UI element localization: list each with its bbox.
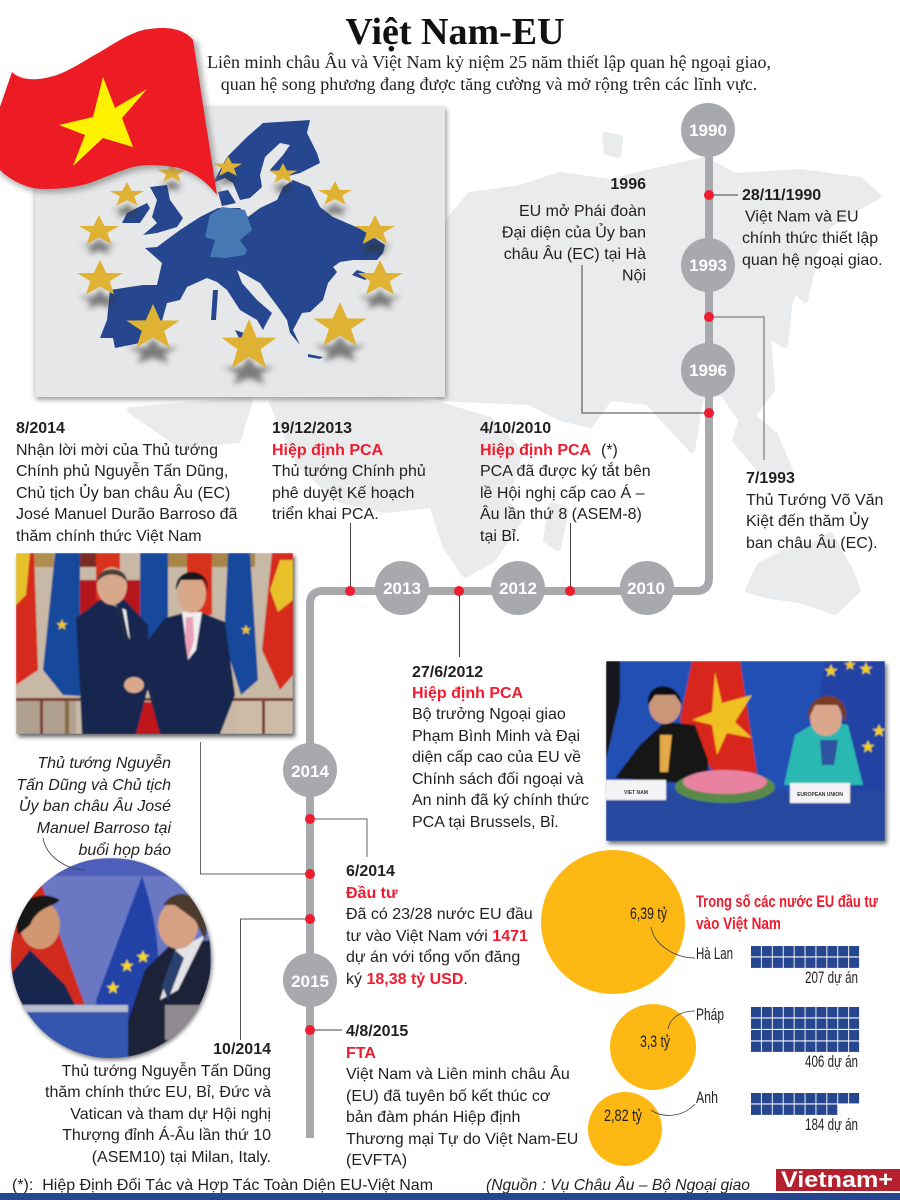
event: 10/2014: Vatican và tham dự Hội nghị xyxy=(70,1106,271,1123)
project squares: UK: 184 dự án xyxy=(805,1115,858,1134)
event: 27/6/2012: 27/6/2012 xyxy=(412,664,483,681)
photo: press conference circle xyxy=(9,857,215,1063)
event: 4/10/2010: Âu lần thứ 8 (ASEM-8) xyxy=(480,504,642,523)
project squares: France: 406 dự án xyxy=(805,1052,858,1071)
event: 27/6/2012: PCA tại Brussels, Bỉ. xyxy=(412,814,559,831)
event: 4/10/2010: 4/10/2010 xyxy=(480,420,551,437)
bottom strip xyxy=(0,1193,900,1200)
EU stars xyxy=(77,156,403,368)
year labels: 2013 xyxy=(383,579,421,598)
bubble: UK xyxy=(588,1088,718,1166)
background world map xyxy=(130,135,878,612)
event: 28/11/1990: 28/11/1990 xyxy=(742,187,821,204)
event: 4/8/2015: (EU) đã tuyên bố kết thúc cơ xyxy=(346,1088,551,1105)
project squares: Netherlands xyxy=(751,946,860,987)
bubble: France: 3,3 tỷ xyxy=(640,1032,670,1051)
project squares: Netherlands: 207 dự án xyxy=(805,968,858,987)
event: 10/2014: 10/2014 xyxy=(213,1041,271,1058)
caption leader line xyxy=(43,838,86,870)
year labels: 2010 xyxy=(627,579,665,598)
event: 4/8/2015: Việt Nam và Liên minh châu Âu xyxy=(346,1064,570,1083)
photo: Barroso and Nguyen Tan Dung handshake xyxy=(16,553,295,737)
bubble: UK: 2,82 tỷ xyxy=(604,1106,642,1125)
event: 27/6/2012: Hiệp định PCA xyxy=(412,685,524,702)
event: 8/2014: Chính phủ Nguyễn Tấn Dũng, xyxy=(16,461,228,480)
photo caption: Tấn Dũng và Chủ tịch xyxy=(16,777,171,794)
event: 4/10/2010: PCA đã được ký tắt bên xyxy=(480,461,651,480)
event: 6/2014: 6/2014 xyxy=(346,863,395,880)
event: 7/1993: 7/1993 xyxy=(746,470,795,487)
event: 28/11/1990: Việt Nam và EU xyxy=(745,208,859,226)
year labels: 2012 xyxy=(499,579,537,598)
event: 7/1993: Thủ Tướng Võ Văn xyxy=(746,492,883,509)
event: 8/2014: Chủ tịch Ủy ban châu Âu (EC) xyxy=(16,483,230,502)
event: 10/2014: (ASEM10) tại Milan, Italy. xyxy=(92,1149,271,1166)
photo: PCA signing xyxy=(606,659,887,844)
chart heading xyxy=(696,893,878,933)
event: 4/8/2015: FTA xyxy=(346,1045,376,1062)
event: 8/2014: 8/2014 xyxy=(16,420,65,437)
year labels xyxy=(291,121,727,991)
photo caption: Manuel Barroso tại xyxy=(37,820,171,837)
year labels: 1996 xyxy=(689,361,727,380)
event: 19/12/2013: Thủ tướng Chính phủ xyxy=(272,463,426,480)
event: 4/10/2010: lề Hội nghị cấp cao Á – xyxy=(480,483,645,502)
project squares: UK xyxy=(751,1093,860,1134)
timeline xyxy=(200,103,764,1138)
year labels: 1990 xyxy=(689,121,727,140)
Germany xyxy=(205,207,252,258)
year nodes xyxy=(283,103,735,1007)
event: 7/1993: Kiệt đến thăm Ủy xyxy=(746,511,869,530)
bubble: France xyxy=(610,1004,724,1090)
title: Việt Nam-EU xyxy=(345,11,565,53)
event: 28/11/1990: quan hệ ngoại giao. xyxy=(742,252,883,269)
event: 27/6/2012: diện cấp cao của EU về xyxy=(412,749,581,766)
photo caption: Thủ tướng Nguyễn xyxy=(37,753,171,772)
event: 6/2014: Đầu tư xyxy=(346,885,398,902)
photo caption: buổi họp báo xyxy=(78,841,171,859)
event: 10/2014: Thượng đỉnh Á-Âu lần thứ 10 xyxy=(62,1125,271,1144)
event: 1996: châu Âu (EC) tại Hà xyxy=(504,244,646,263)
connector lines xyxy=(200,195,764,1040)
event: 4/10/2010: tại Bỉ. xyxy=(480,528,520,545)
EU star shadows xyxy=(79,173,401,384)
event: 19/12/2013: Hiệp định PCA xyxy=(272,442,384,459)
chart heading: vào Việt Nam xyxy=(696,915,781,933)
photo: PCA signing: EUROPEAN UNION xyxy=(797,792,843,798)
footnote: (*): Hiệp Định Đối Tác và Hợp Tác Toàn Diện EU-Việt Nam xyxy=(12,1177,433,1194)
event: 1996: Đại diện của Ủy ban xyxy=(502,222,646,242)
event: 19/12/2013: 19/12/2013 xyxy=(272,420,352,437)
event: 4/8/2015: bản đàm phán Hiệp định xyxy=(346,1109,520,1126)
bubble: Netherlands: Hà Lan xyxy=(696,944,733,963)
event: 1996: 1996 xyxy=(610,176,646,193)
photo caption: Ủy ban châu Âu José xyxy=(19,796,171,815)
chart: EU investors in Vietnam xyxy=(541,850,878,1166)
year labels: 2015 xyxy=(291,972,329,991)
event: 4/8/2015: (EVFTA) xyxy=(346,1152,407,1169)
event: 10/2014: Thủ tướng Nguyễn Tấn Dũng xyxy=(62,1061,271,1080)
event: 4/8/2015: Thương mại Tự do Việt Nam-EU xyxy=(346,1131,578,1148)
event: 8/2014: Nhận lời mời của Thủ tướng xyxy=(16,442,218,459)
event: 6/2014: tư vào Việt Nam với 1471 xyxy=(346,928,528,945)
bubble: Netherlands: 6,39 tỷ xyxy=(630,904,667,923)
event: 27/6/2012: Phạm Bình Minh và Đại xyxy=(412,728,580,745)
event: 27/6/2012: An ninh đã ký chính thức xyxy=(412,792,589,809)
photo: PCA signing: VIET NAM xyxy=(624,790,648,796)
event: 19/12/2013: phê duyệt Kế hoạch xyxy=(272,485,414,502)
event: 28/11/1990: chính thức thiết lập xyxy=(742,230,878,247)
event: 7/1993: ban châu Âu (EC). xyxy=(746,533,878,552)
event: 6/2014: Đã có 23/28 nước EU đầu xyxy=(346,906,533,923)
year labels: 1993 xyxy=(689,256,727,275)
event: 27/6/2012: Chính sách đối ngoại và xyxy=(412,771,584,788)
project squares: France xyxy=(751,1007,860,1071)
subtitle: Liên minh châu Âu và Việt Nam kỷ niệm 25 năm thiết lập quan hệ ngoại giao, xyxy=(207,51,771,72)
event: 4/10/2010: Hiệp định PCA xyxy=(480,442,592,459)
event: 4/8/2015: 4/8/2015 xyxy=(346,1023,408,1040)
event: 8/2014: José Manuel Durão Barroso đã xyxy=(16,506,238,523)
bubble: Netherlands xyxy=(541,850,733,994)
bubble: France: Pháp xyxy=(696,1005,724,1024)
event: 1996: EU mở Phái đoàn xyxy=(519,203,646,220)
event: 4/10/2010: (*) xyxy=(601,442,618,459)
logo: Vietnam+: Vietnam+ xyxy=(781,1167,893,1192)
event: 8/2014: thăm chính thức Việt Nam xyxy=(16,528,202,545)
bubble: UK: Anh xyxy=(696,1088,718,1107)
event: 1996: Nội xyxy=(622,268,646,284)
icon: Vietnam flag xyxy=(0,28,220,197)
event: 27/6/2012: Bộ trưởng Ngoại giao xyxy=(412,706,566,723)
event: 19/12/2013: triển khai PCA. xyxy=(272,505,379,523)
event: 6/2014: ký 18,38 tỷ USD. xyxy=(346,971,468,988)
event: 6/2014: dự án với tổng vốn đăng xyxy=(346,948,520,966)
panel: EU map xyxy=(35,107,446,399)
subtitle: quan hệ song phương đang được tăng cường và mở rộng trên các lĩnh vực. xyxy=(221,74,757,94)
year labels: 2014 xyxy=(291,762,329,781)
map of Europe xyxy=(100,120,385,359)
source: (Nguồn : Vụ Châu Âu – Bộ Ngoại giao xyxy=(486,1175,750,1194)
event: 10/2014: thăm chính thức EU, Bỉ, Đức và xyxy=(45,1084,271,1101)
red event dots xyxy=(305,190,714,1035)
